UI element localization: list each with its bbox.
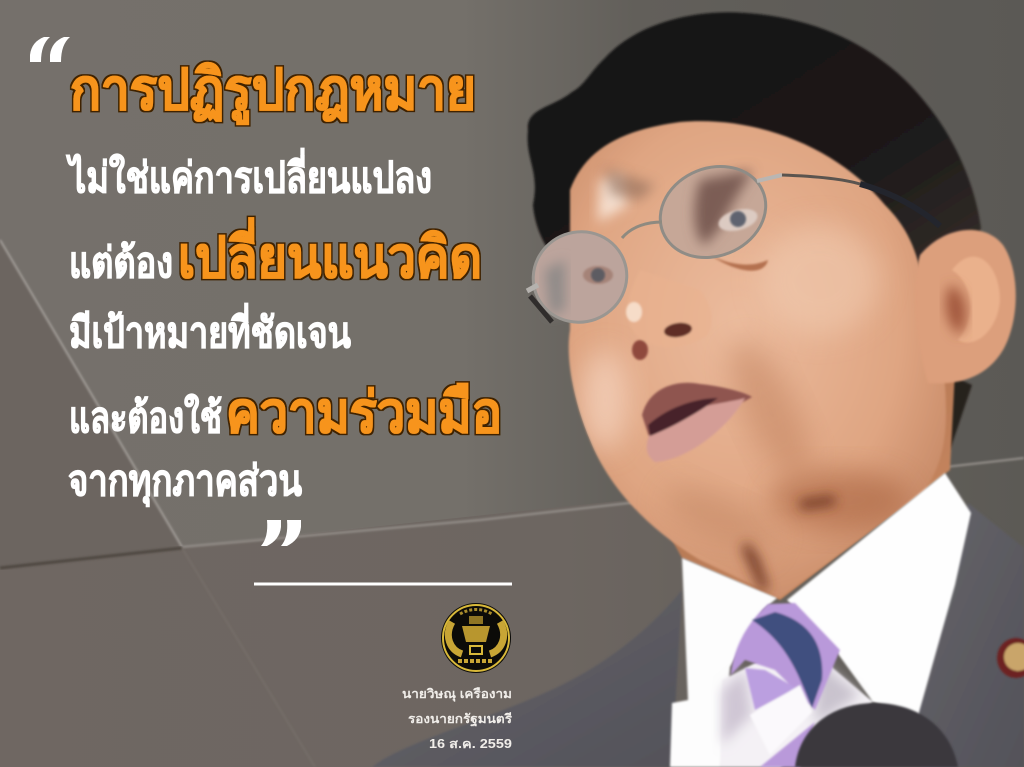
lapel pin	[997, 638, 1024, 678]
line: clear goals: มีเป้าหมายที่ชัดเจน	[69, 303, 351, 356]
highlight: change mindset: เปลี่ยนแนวคิด	[178, 217, 482, 290]
hair	[528, 12, 981, 300]
neck	[650, 370, 955, 600]
quote text	[66, 58, 502, 507]
ear	[915, 230, 1016, 383]
hair behind neck	[940, 370, 972, 450]
icon: government seal	[441, 603, 511, 673]
jacket right	[906, 503, 1024, 767]
line: from all sectors: จากทุกภาคส่วน	[68, 457, 302, 507]
line: not just change: ไม่ใช่แค่การเปลี่ยนแปลง	[66, 148, 432, 201]
facial highlights and shadows	[581, 168, 910, 565]
date: 16 ส.ค. 2559	[429, 737, 512, 751]
divider rule	[254, 582, 512, 586]
speaker name: นายวิษณุ เครืองาม	[402, 687, 512, 702]
mouth	[642, 383, 752, 462]
glasses frame	[520, 151, 940, 335]
nose	[626, 270, 712, 360]
highlight: cooperation: ความร่วมมือ	[226, 381, 502, 445]
eyes and lenses	[520, 151, 780, 335]
shirt collar	[670, 473, 971, 767]
portrait photo of the speaker	[372, 12, 1024, 767]
opening quote mark	[30, 37, 70, 62]
microphone	[795, 703, 958, 767]
neck creases	[745, 500, 835, 590]
line: must: แต่ต้อง	[69, 239, 173, 286]
face	[569, 121, 946, 598]
jacket left	[372, 590, 682, 767]
line: and must use: และต้องใช้	[69, 393, 222, 441]
necktie	[731, 603, 840, 767]
speaker title: รองนายกรัฐมนตรี	[408, 712, 512, 727]
attribution	[402, 687, 512, 751]
headline: law reform: การปฏิรูปกฎหมาย	[70, 58, 476, 125]
closing quote mark	[261, 520, 301, 546]
